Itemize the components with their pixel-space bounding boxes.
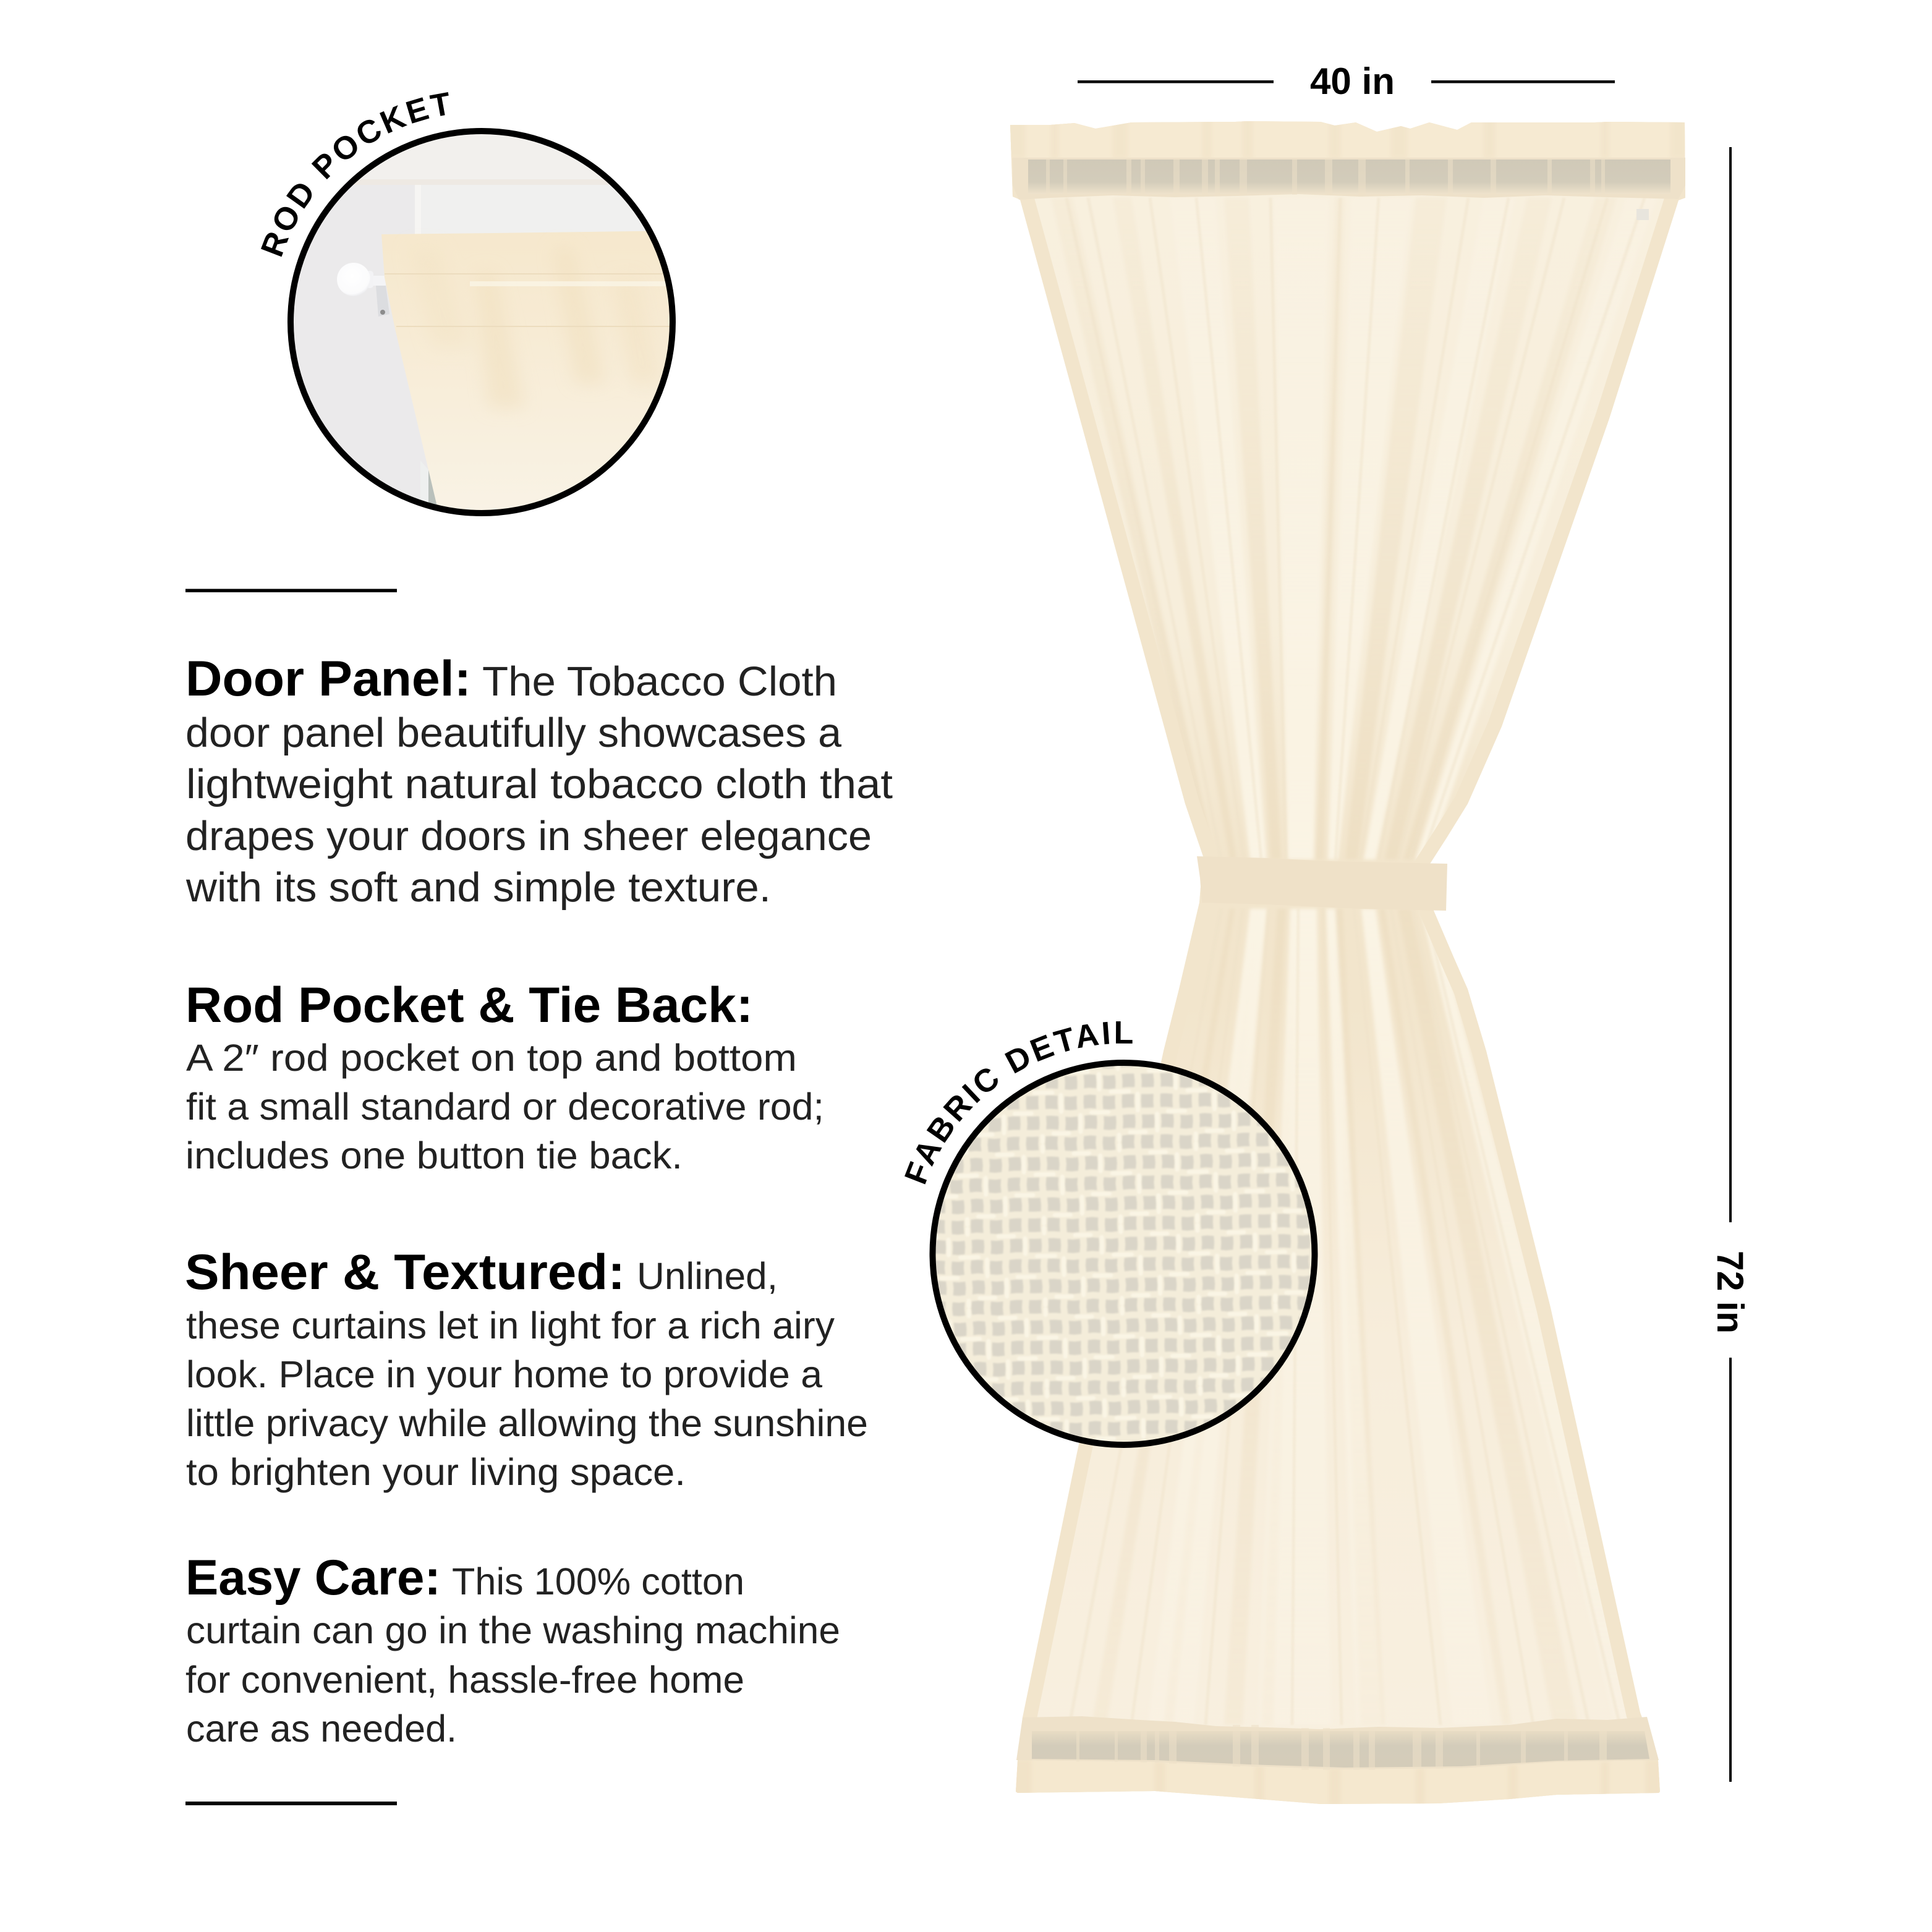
heading: rod pocket and tie back: Rod Pocket & Tie Back:	[185, 977, 753, 1033]
top divider rule	[185, 589, 397, 592]
heading: sheer and textured: Sheer & Textured:	[185, 1245, 625, 1300]
body: rod pocket and tie back	[185, 1037, 824, 1177]
width label: 40 in	[1310, 61, 1395, 102]
body: door panel	[185, 658, 893, 911]
top rod pocket band	[1013, 158, 1685, 200]
body: rod pocket and tie back: A 2″ rod pocket on top and bottom	[186, 1037, 797, 1079]
height measurement: 72 in	[1709, 147, 1751, 1782]
body: sheer and textured: Unlined,	[637, 1255, 778, 1297]
body: easy care: This 100% cotton	[452, 1560, 744, 1602]
bottom hem	[1014, 1760, 1663, 1811]
heading: easy care: Easy Care:	[185, 1550, 441, 1606]
body: sheer and textured: to brighten your living space.	[186, 1451, 686, 1493]
text block: easy care	[185, 1550, 840, 1750]
body: easy care	[185, 1560, 840, 1750]
bottom divider rule	[185, 1802, 397, 1805]
top header hem	[1008, 117, 1688, 158]
body: easy care: curtain can go in the washing machine	[186, 1609, 840, 1651]
fabric folds and stitches	[385, 247, 681, 408]
curtain body fabric	[1021, 194, 1664, 1768]
body: door panel: with its soft and simple texture.	[185, 864, 771, 911]
height label: 72 in	[1709, 1251, 1751, 1334]
selvedge edges	[1010, 121, 1685, 1804]
fabric detail label: FABRIC DETAIL	[904, 1021, 1133, 1185]
body: easy care: care as needed.	[186, 1708, 457, 1750]
bottom rod pocket band	[1016, 1716, 1659, 1770]
text block: sheer and textured	[185, 1245, 868, 1493]
curtain rod and finial	[337, 263, 389, 317]
body: sheer and textured: little privacy while allowing the sunshine	[186, 1402, 868, 1444]
small care tag shadow	[1636, 209, 1649, 220]
body: sheer and textured: look. Place in your home to provide a	[186, 1353, 822, 1395]
lower pleats	[1097, 908, 1574, 1719]
body: rod pocket and tie back: fit a small standard or decorative rod;	[186, 1086, 824, 1128]
body: sheer and textured	[186, 1255, 868, 1493]
rod pocket detail circle	[284, 124, 681, 519]
text block: door panel	[185, 651, 893, 911]
body: easy care: for convenient, hassle-free home	[185, 1659, 744, 1701]
tie back band	[1197, 856, 1447, 911]
rod pocket label: ROD POCKET	[261, 92, 449, 257]
body: door panel: lightweight natural tobacco cloth that	[186, 761, 893, 807]
body: door panel: drapes your doors in sheer elegance	[185, 813, 872, 859]
body: sheer and textured: these curtains let in light for a rich airy	[186, 1304, 835, 1347]
body: rod pocket and tie back: includes one button tie back.	[185, 1134, 683, 1177]
fabric detail circle	[921, 1051, 1329, 1459]
width measurement: 40 in	[1078, 61, 1615, 102]
top hem gathers	[1008, 117, 1687, 158]
heading: door panel: Door Panel:	[185, 651, 471, 707]
lower fold lines	[1070, 909, 1620, 1725]
upper pleats	[1088, 333, 1570, 861]
upper fold lines	[1066, 198, 1645, 859]
curtain door panel	[989, 111, 1700, 1818]
rod pocket curtain fabric	[381, 231, 680, 519]
body: door panel: The Tobacco Cloth	[482, 658, 837, 705]
body: door panel: door panel beautifully showcases a	[185, 710, 842, 756]
text block: rod pocket and tie back	[185, 977, 824, 1177]
